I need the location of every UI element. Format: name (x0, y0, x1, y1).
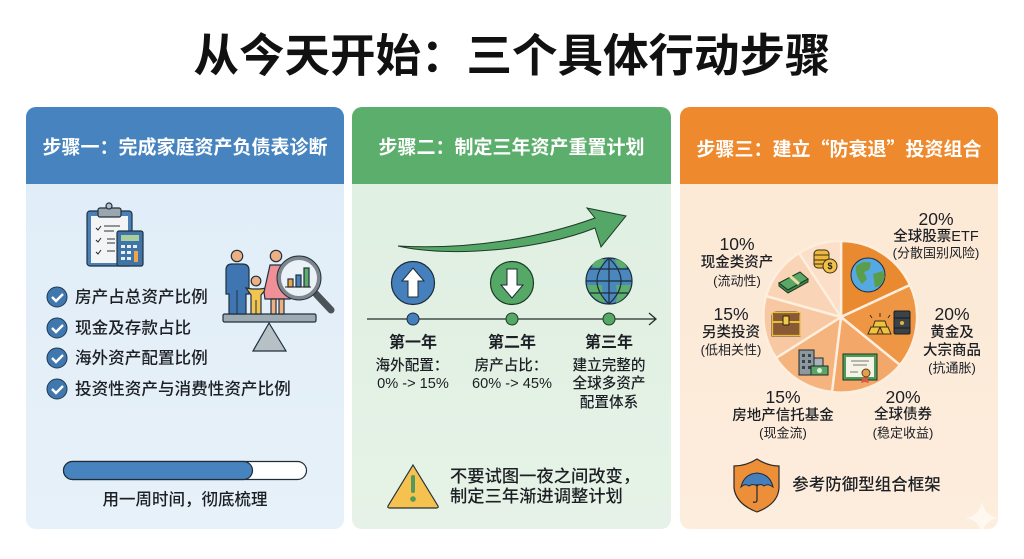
label: REITs: 15% (765, 387, 801, 407)
label: gold and commodities: 大宗商品 (923, 341, 981, 359)
check item: investment vs consumption: 投资性资产与消费性资产比例 (75, 380, 291, 398)
year one text: 第一年 (389, 332, 437, 352)
label: global equity ETF: (分散国别风险) (893, 246, 979, 260)
watermark sparkle (966, 502, 998, 529)
icon: bond certificate (843, 354, 877, 383)
year two text (472, 332, 552, 392)
icon: coins (814, 250, 837, 273)
year one text: 0% -> 15% (377, 376, 449, 392)
icon: family on a balance with magnifier (223, 250, 331, 351)
year three text (573, 332, 645, 411)
progress caption: 用一周时间，彻底梳理 (102, 490, 268, 509)
label: REITs: 房地产信托基金 (732, 406, 834, 424)
label: global bonds: 全球债券 (874, 405, 932, 423)
step two header: 步骤二：制定三年资产重置计划 (378, 136, 645, 158)
icon: warning triangle (388, 465, 438, 508)
panel: step one (26, 107, 344, 529)
year two text: 房产占比： (475, 357, 547, 374)
year three text: 建立完整的 (573, 356, 645, 374)
label: cash assets: 现金类资产 (701, 253, 773, 271)
label: alternatives: 另类投资 (702, 324, 760, 341)
pie chart (763, 241, 917, 393)
icon: gold and oil barrel (868, 311, 910, 334)
step one header (26, 107, 344, 184)
timeline axis (367, 313, 656, 325)
step three header (680, 107, 998, 184)
icon: coins: $ (827, 261, 833, 271)
label: cash assets (701, 234, 773, 288)
title: 从今天开始：三个具体行动步骤 (193, 30, 831, 82)
check item: overseas share: 海外资产配置比例 (75, 348, 208, 368)
year two text: 60% -> 45% (472, 376, 552, 392)
label: global bonds: 20% (885, 387, 921, 407)
label: global equity ETF: 20% (918, 209, 954, 229)
label: alternatives: (低相关性) (701, 342, 761, 358)
icon: real estate building (799, 350, 828, 375)
icon: earth (851, 258, 885, 292)
label: gold and commodities: (抗通胀) (928, 360, 976, 376)
label: gold and commodities: 20% (934, 304, 970, 324)
panel: step three (680, 107, 999, 535)
step one header: 步骤一：完成家庭资产负债表诊断 (42, 136, 328, 158)
icon: globe (586, 258, 632, 304)
year two text: 第二年 (488, 332, 536, 352)
check item: cash share: 现金及存款占比 (75, 318, 191, 338)
icon: cash stacks (779, 272, 808, 293)
step three header: 步骤三：建立“防衰退”投资组合 (696, 134, 982, 162)
icon: treasure chest (772, 312, 800, 336)
year three text: 配置体系 (580, 394, 638, 411)
label: global equity ETF (893, 209, 979, 260)
label: global bonds: (稳定收益) (873, 426, 933, 440)
progress bar (64, 462, 306, 480)
label: REITs: (现金流) (759, 426, 807, 440)
year one text: 海外配置： (376, 357, 448, 374)
label: gold and commodities (923, 304, 981, 376)
step two header (352, 107, 671, 184)
diagnosis checklist (47, 287, 291, 399)
label: cash assets: (流动性) (713, 274, 761, 288)
year three text: 全球多资产 (573, 374, 645, 392)
icon: down arrow (490, 262, 534, 304)
arrow: rising trend (398, 208, 626, 252)
warning note: 不要试图一夜之间改变， (450, 466, 640, 486)
label: cash assets: 10% (719, 234, 755, 254)
panel: step two (352, 107, 671, 529)
icon: up arrow (392, 262, 434, 304)
framework caption: 参考防御型组合框架 (792, 475, 941, 494)
warning note (450, 466, 640, 506)
label: gold and commodities: 黄金及 (930, 323, 974, 341)
label: global bonds (873, 387, 933, 440)
year one text (376, 332, 449, 392)
label: REITs (732, 387, 834, 440)
label: global equity ETF: 全球股票ETF (893, 227, 979, 245)
year three text: 第三年 (585, 332, 633, 352)
icon: clipboard and calculator (87, 203, 143, 266)
icon: shield with umbrella (734, 459, 779, 512)
label: alternatives (701, 304, 761, 358)
warning note: 制定三年渐进调整计划 (450, 486, 623, 506)
check item: property share: 房产占总资产比例 (75, 288, 208, 306)
label: alternatives: 15% (713, 304, 749, 324)
